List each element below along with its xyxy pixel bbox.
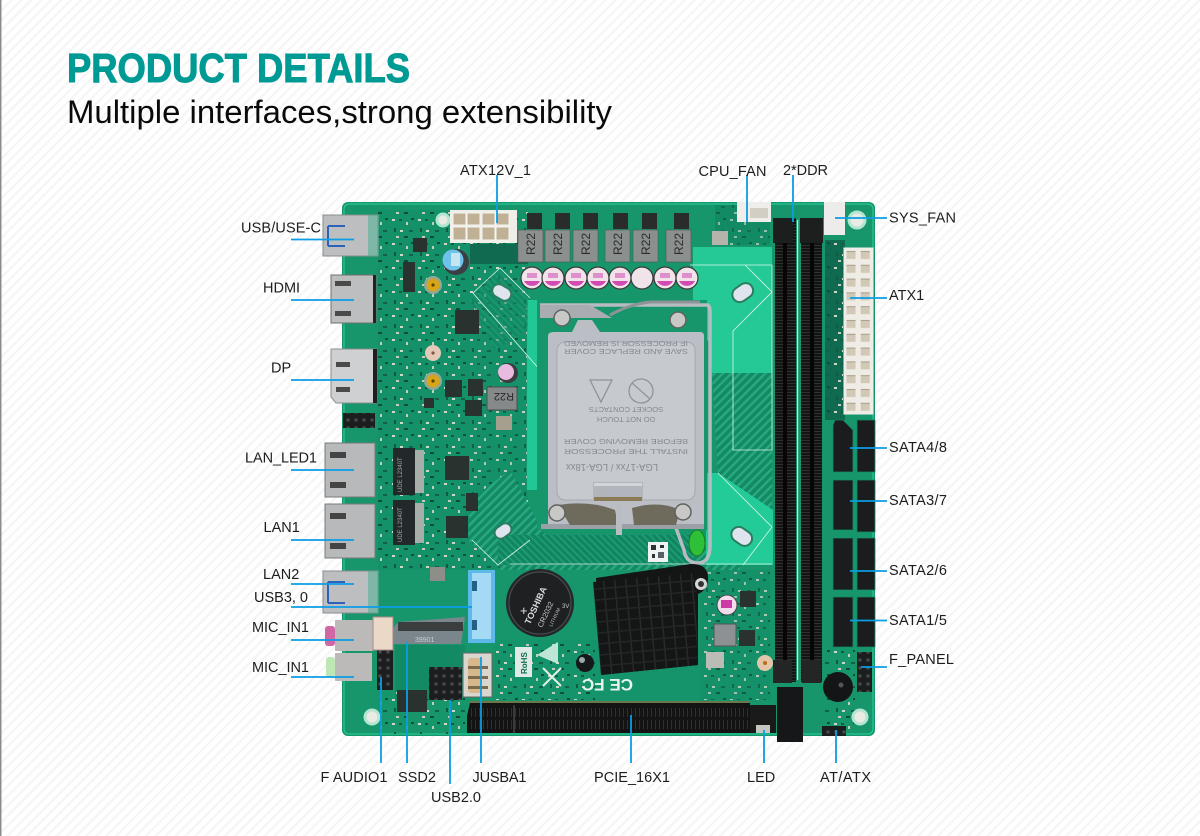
callout: LED: LED [747,770,775,786]
CMOS battery: 3V [562,604,569,610]
callout: SYS_FAN [835,211,956,227]
blue electrolytic capacitor [442,249,469,275]
mint copper planes [472,247,773,565]
cover warning text: BEFORE REMOVING COVER [563,437,688,446]
warning icons [590,379,653,403]
CMOS battery: CR2032 [536,600,555,629]
callout: JUSBA1 [472,657,526,786]
callout: SYS_FAN: SYS_FAN [889,211,956,227]
processor cover [548,320,704,526]
callout: 2*DDR [783,163,828,222]
callout: 2*DDR: 2*DDR [783,163,828,179]
callout: SATA1/5 [850,613,947,629]
cover warning text: SOCKET CONTACTS [589,405,663,414]
callout: F AUDIO1: F AUDIO1 [320,770,388,786]
small inductors and capacitors [430,231,737,668]
callout: SATA3/7: SATA3/7 [889,493,947,509]
callout: CPU_FAN: CPU_FAN [698,164,766,180]
PCIe slot [467,687,803,742]
callout: F_PANEL: F_PANEL [889,652,954,668]
gold standoffs [424,276,773,671]
callout: SATA1/5: SATA1/5 [889,613,947,629]
callout: ATX1 [850,288,924,304]
R22 inductors: R22 [639,233,653,255]
ATX12V connector [450,210,517,243]
callout: SATA4/8 [850,440,947,456]
R22 inductors: R22 [672,233,686,255]
heatsink [576,564,708,675]
motherboard [323,202,875,742]
callout: F AUDIO1 [320,677,388,786]
CMOS battery [506,569,574,637]
callout: MIC_IN1 upper [252,620,354,640]
network transformers [393,448,424,545]
callout: PCIE_16X1 [594,715,670,786]
component field [378,205,855,734]
callout: AT/ATX: AT/ATX [820,770,871,786]
callout: USB2.0: USB2.0 [431,790,481,806]
audio jacks [325,617,393,681]
callout: SATA3/7 [850,493,947,509]
cover tab [593,482,643,500]
callout: HDMI [263,281,354,300]
QR label [648,542,668,562]
R22 inductors: R22 [611,233,625,255]
cover warning text: SAVE AND REPLACE COVER [563,347,688,356]
buzzer [823,672,853,702]
pink capacitors [521,267,698,289]
SYS fan connector [824,202,845,235]
trace regions [468,268,772,568]
HDMI port [331,275,376,323]
rear USB port top [323,215,379,256]
callout: USB/USE-C: USB/USE-C [241,221,321,237]
ATX power connector [844,248,873,414]
R22 inductors: R22 [579,233,593,255]
chips [343,238,756,712]
green glue mark [689,530,705,556]
pcb base [342,202,875,736]
F_PANEL header [857,652,872,692]
callout: USB/USE-C [241,221,354,240]
callout: SSD2: SSD2 [398,770,436,786]
network transformers: UDE L2340T [398,457,404,492]
callout: LAN_LED1: LAN_LED1 [245,451,317,467]
callout: LED [747,730,775,786]
internal USB port [463,653,492,697]
callout: LAN1 [264,520,354,540]
cover warning text: LGA-17xx / LGA-18xx [566,461,658,472]
callout: USB3, 0: USB3, 0 [254,590,308,606]
DIMM slots [773,218,823,683]
callout: DP: DP [271,361,291,377]
R22 inductors: R22 [524,233,538,255]
callout: PCIE_16X1: PCIE_16X1 [594,770,670,786]
subtitle: Multiple interfaces,strong extensibility [67,94,612,130]
small inductors and capacitors: R22 [494,390,514,402]
rear USB port bottom [323,571,379,613]
oval mounting holes [490,280,756,549]
callout: LAN1: LAN1 [264,520,300,536]
callout: DP [271,361,354,380]
callout: F_PANEL [861,652,954,668]
certification logos [515,642,633,694]
CMOS battery: TOSHIBA [523,585,549,626]
callout: ATX12V_1: ATX12V_1 [460,163,531,179]
title: PRODUCT DETAILS [67,45,410,91]
AT/ATX jumper [822,726,846,736]
socket base [537,300,707,530]
callout: LAN2 [263,567,354,584]
cover warning text: INSTALL THE PROCESSOR [563,447,688,456]
DP port [331,349,377,403]
M.2 slot [392,617,465,644]
CPU fan connector [737,202,771,222]
callout: HDMI: HDMI [263,281,300,297]
network transformers: UDE L2340T [398,507,404,542]
R22 inductors: R22 [551,233,565,255]
certification logos: CE FC [582,675,633,694]
lower clamp [541,524,704,529]
callout: ATX12V_1 [460,163,531,223]
USB 3.0 header [468,570,495,643]
LAN ports [325,443,375,558]
CMOS battery: + [520,603,528,618]
CMOS battery: LITHIUM [548,607,562,628]
callout: USB2.0 [431,700,481,806]
corner holes [365,212,867,724]
retention frame [540,305,710,563]
socket screws [549,310,691,521]
cover warning text: DO NOT TOUCH [597,415,655,424]
mosfets [527,213,689,229]
R22 inductors [518,230,691,262]
SATA connectors [833,420,875,647]
callout: LAN_LED1 [245,451,354,470]
callout: SATA2/6: SATA2/6 [889,563,947,579]
callout: SATA4/8: SATA4/8 [889,440,947,456]
callout: JUSBA1: JUSBA1 [472,770,526,786]
callout: MIC_IN1 lower: MIC_IN1 [252,660,309,676]
callout: AT/ATX [820,730,871,786]
callout: MIC_IN1 upper: MIC_IN1 [252,620,309,636]
cover warning text [563,339,688,472]
callout: CPU_FAN [698,164,766,222]
callout: MIC_IN1 lower [252,660,354,677]
cover warning text: IF PROCESSOR IS REMOVED [563,339,688,348]
CPU socket [537,300,710,563]
certification logos: RoHS [520,652,529,674]
callout: SATA2/6 [850,563,947,579]
M.2 slot: 39901 [415,637,435,644]
callout: LAN2: LAN2 [263,567,299,583]
callout: ATX1: ATX1 [889,288,924,304]
